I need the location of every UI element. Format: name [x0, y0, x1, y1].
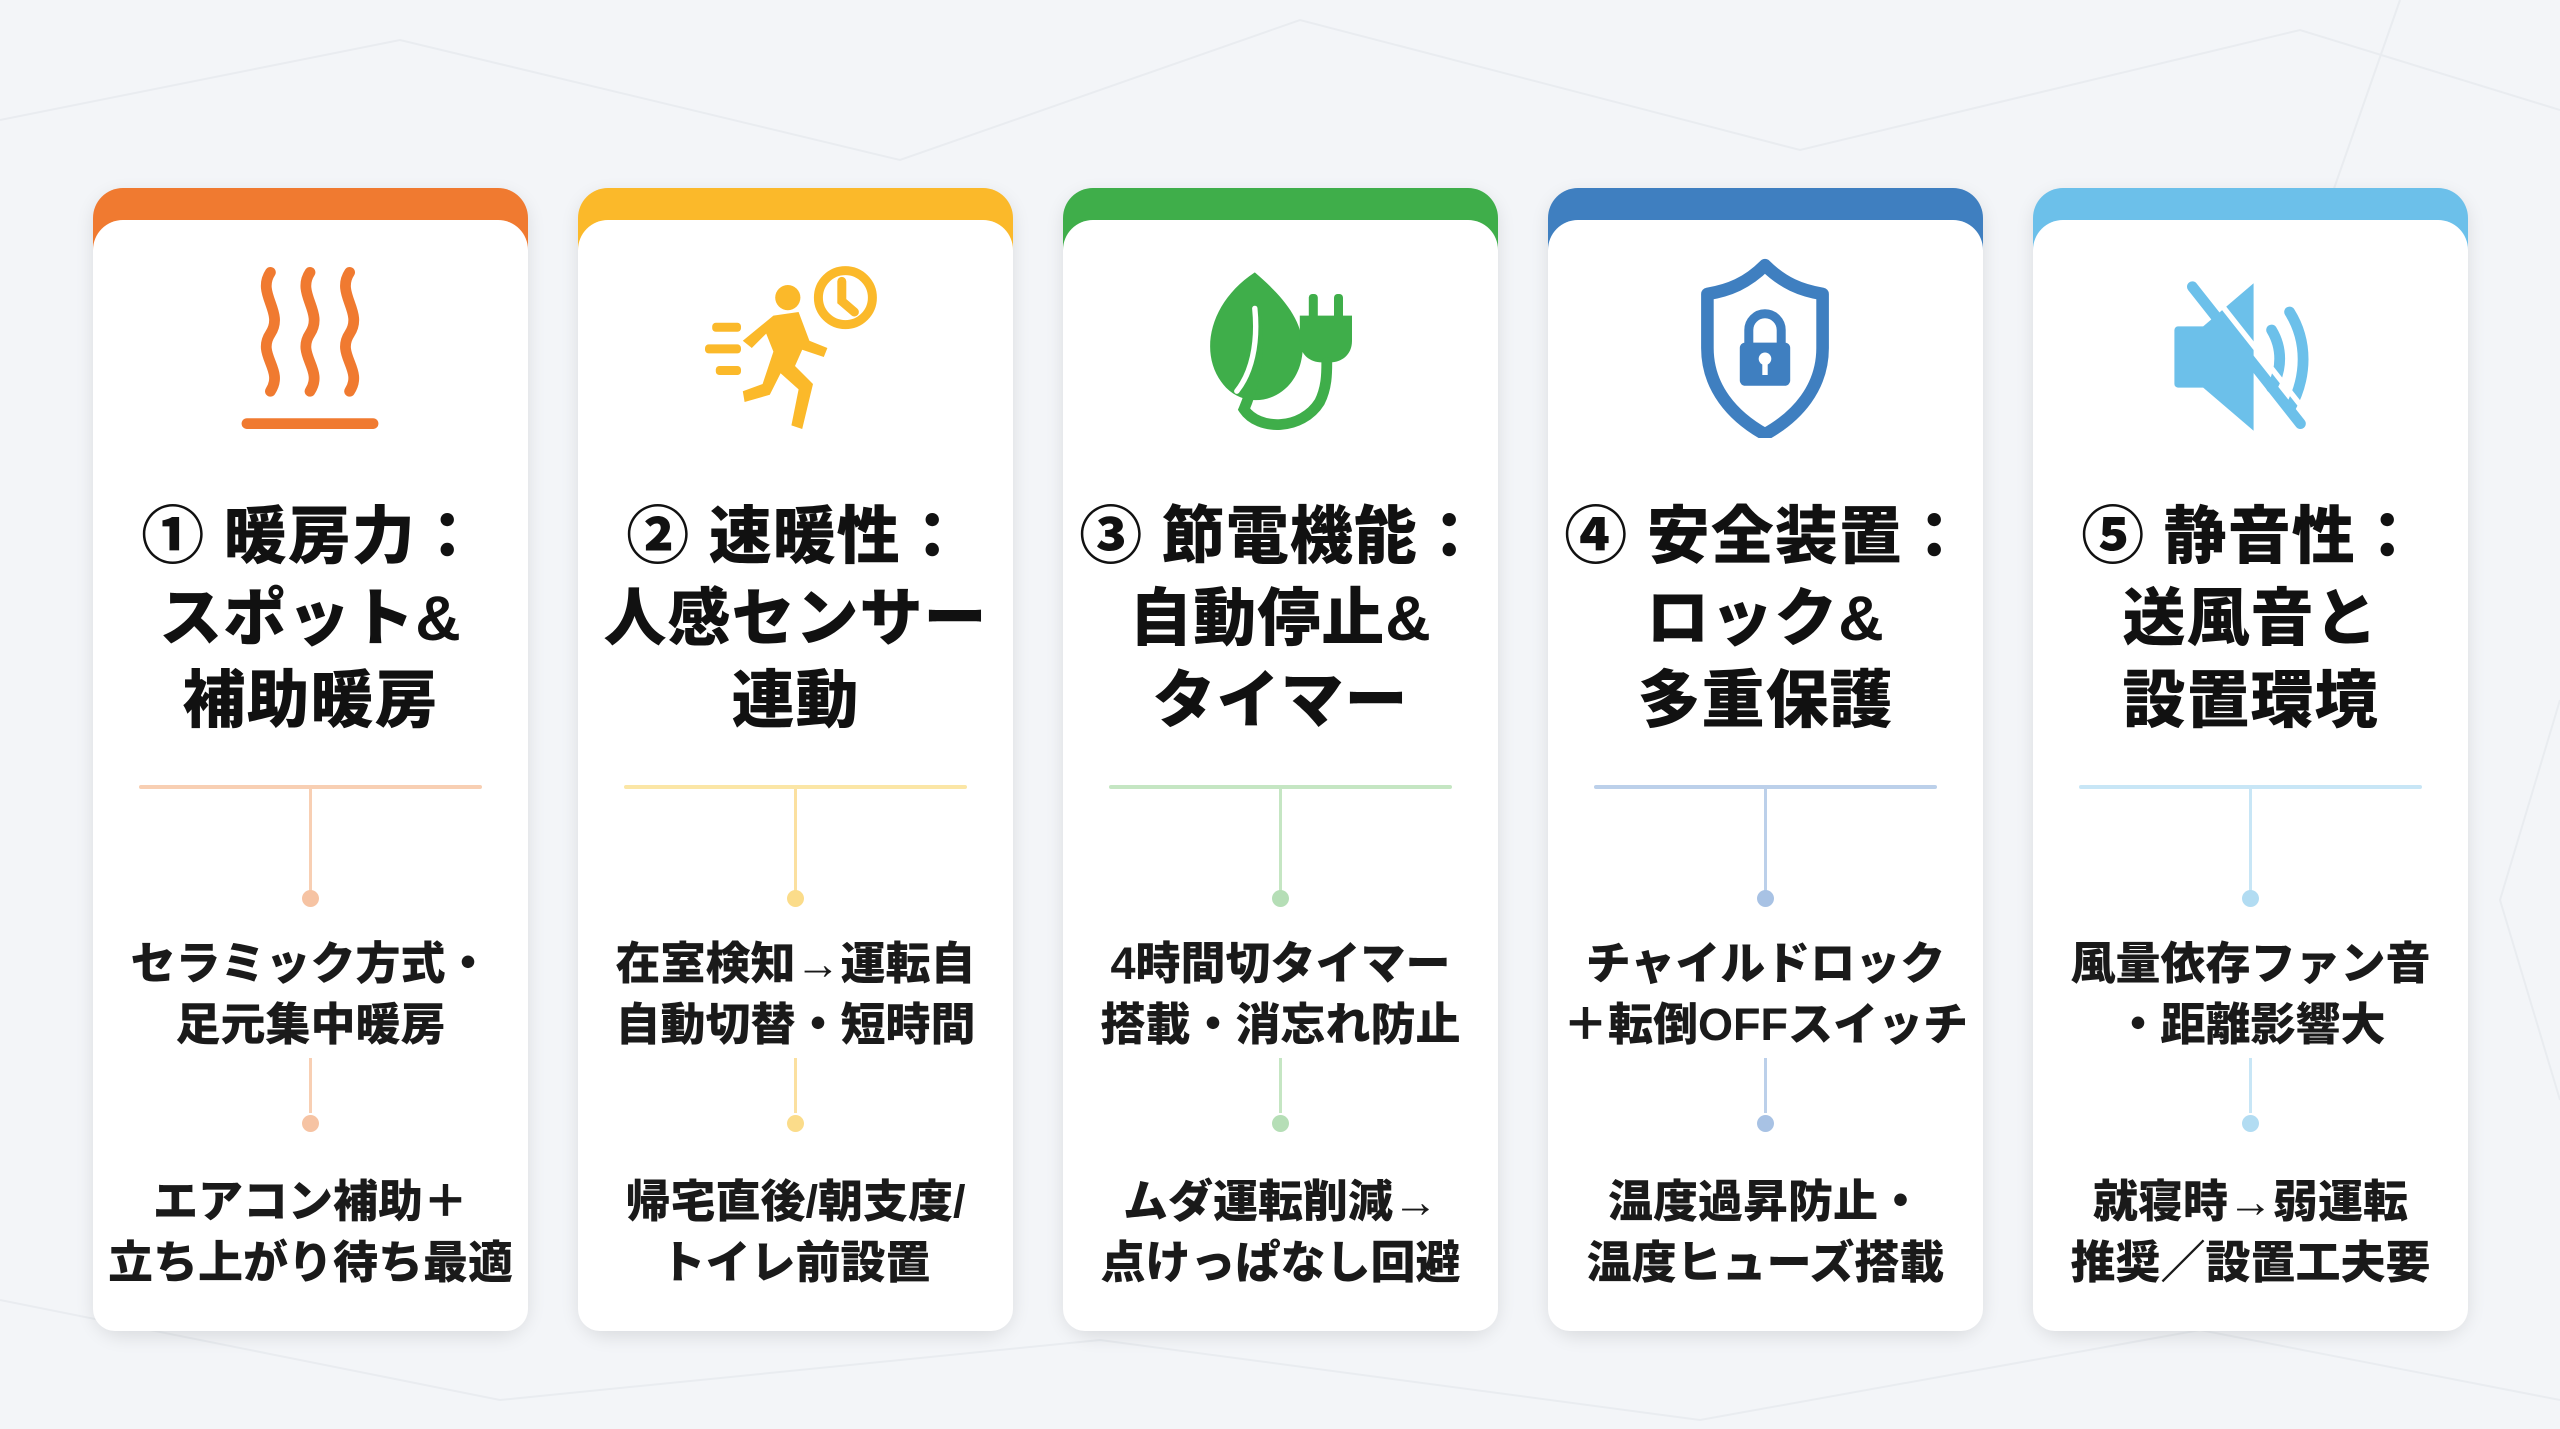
- text: point 2: 温度ヒューズ搭載: [1587, 1237, 1944, 1288]
- icon: leaf plug: [1210, 272, 1352, 430]
- heading: ⑤ 静音性：: [2081, 502, 2420, 572]
- text: point 2: 点けっぱなし回避: [1100, 1237, 1460, 1288]
- text: point 1: ＋転倒OFFスイッチ: [1563, 999, 1968, 1050]
- heading: タイマー: [1152, 666, 1408, 736]
- text: point 2: 推奨／設置工夫要: [2070, 1237, 2430, 1288]
- text: point 1: [130, 938, 490, 1050]
- heading: ① 暖房力：: [141, 502, 480, 572]
- panel: 2 speed: [578, 188, 1013, 1331]
- heading: [1079, 502, 1482, 736]
- text: point 1: [1563, 938, 1968, 1050]
- heading: ③ 節電機能：: [1079, 502, 1482, 572]
- panel: 3 energy: [1063, 188, 1498, 1331]
- text: point 1: 4時間切タイマー: [1110, 938, 1451, 989]
- text: point 2: [2070, 1176, 2430, 1288]
- heading: 設置環境: [2122, 666, 2378, 736]
- text: point 1: セラミック方式・: [130, 938, 490, 989]
- text: point 2: エアコン補助＋: [153, 1176, 468, 1227]
- icon: heat waves: [242, 267, 378, 429]
- heading: 人感センサー: [604, 584, 988, 654]
- heading: 送風音と: [2122, 584, 2378, 654]
- heading: [1564, 502, 1967, 736]
- text: point 2: 温度過昇防止・: [1608, 1176, 1923, 1227]
- text: point 1: ・距離影響大: [2115, 999, 2386, 1050]
- panel: 4 safety: [1548, 188, 1983, 1331]
- text: point 2: [1587, 1176, 1944, 1288]
- text: point 2: ムダ運転削減→: [1123, 1176, 1438, 1227]
- heading: [141, 502, 480, 736]
- icon: runner clock: [705, 266, 877, 429]
- heading: 連動: [732, 666, 860, 736]
- heading: ロック&: [1646, 584, 1885, 654]
- text: point 2: 立ち上がり待ち最適: [108, 1237, 513, 1288]
- text: point 1: [2070, 938, 2430, 1050]
- heading: [2081, 502, 2420, 736]
- text: point 2: 就寝時→弱運転: [2093, 1176, 2408, 1227]
- text: point 1: 風量依存ファン音: [2070, 938, 2430, 989]
- text: point 2: [108, 1176, 513, 1288]
- text: point 1: [1100, 938, 1460, 1050]
- text: point 1: 搭載・消忘れ防止: [1100, 999, 1460, 1050]
- text: point 1: 自動切替・短時間: [615, 999, 976, 1050]
- heading: [604, 502, 988, 736]
- icon: muted speaker: [2174, 281, 2308, 431]
- panel: 1 heating: [93, 188, 528, 1331]
- text: point 1: チャイルドロック: [1586, 938, 1945, 989]
- panel: 5 quiet: [2033, 188, 2468, 1331]
- text: point 2: トイレ前設置: [660, 1237, 930, 1288]
- icon: shield lock: [1701, 258, 1829, 438]
- text: point 2: [1100, 1176, 1460, 1288]
- heading: ② 速暖性：: [626, 502, 965, 572]
- heading: 自動停止&: [1129, 584, 1432, 654]
- text: point 1: 在室検知→運転自: [615, 938, 976, 989]
- heading: ④ 安全装置：: [1564, 502, 1967, 572]
- text: point 2: [625, 1176, 966, 1288]
- text: point 2: 帰宅直後/朝支度/: [625, 1176, 966, 1227]
- heading: 補助暖房: [182, 666, 438, 736]
- heading: 多重保護: [1638, 666, 1894, 736]
- heading: スポット&: [159, 584, 462, 654]
- text: point 1: 足元集中暖房: [175, 999, 446, 1050]
- text: point 1: [615, 938, 976, 1050]
